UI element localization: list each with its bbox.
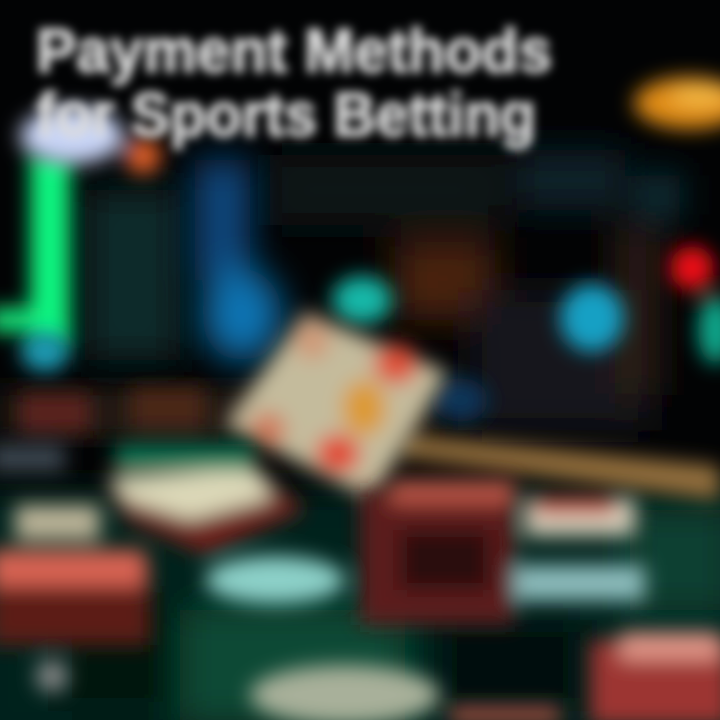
background: wooden rail xyxy=(0,395,430,430)
chip stack: left xyxy=(0,445,150,645)
title: for Sports Betting xyxy=(36,81,536,150)
glow: pale blue and orange top-left xyxy=(20,108,161,372)
lights: coloured bokeh xyxy=(332,246,720,422)
chart: blue column xyxy=(195,160,282,361)
chip: bottom centre xyxy=(250,665,440,720)
wooden stick xyxy=(400,434,720,500)
chart: green line xyxy=(0,155,70,345)
chip stack: centre-left xyxy=(105,445,305,555)
playing card xyxy=(225,312,448,500)
light: orange glow top right xyxy=(634,77,720,129)
background: green table xyxy=(0,490,720,720)
chip stack: bottom right xyxy=(590,632,720,720)
poker chip stacks xyxy=(0,388,720,720)
background: dim screens xyxy=(85,150,680,430)
title xyxy=(36,17,552,150)
chip stack: centre xyxy=(360,480,515,625)
chip stack: right xyxy=(515,498,645,601)
title: Payment Methods xyxy=(36,17,552,86)
